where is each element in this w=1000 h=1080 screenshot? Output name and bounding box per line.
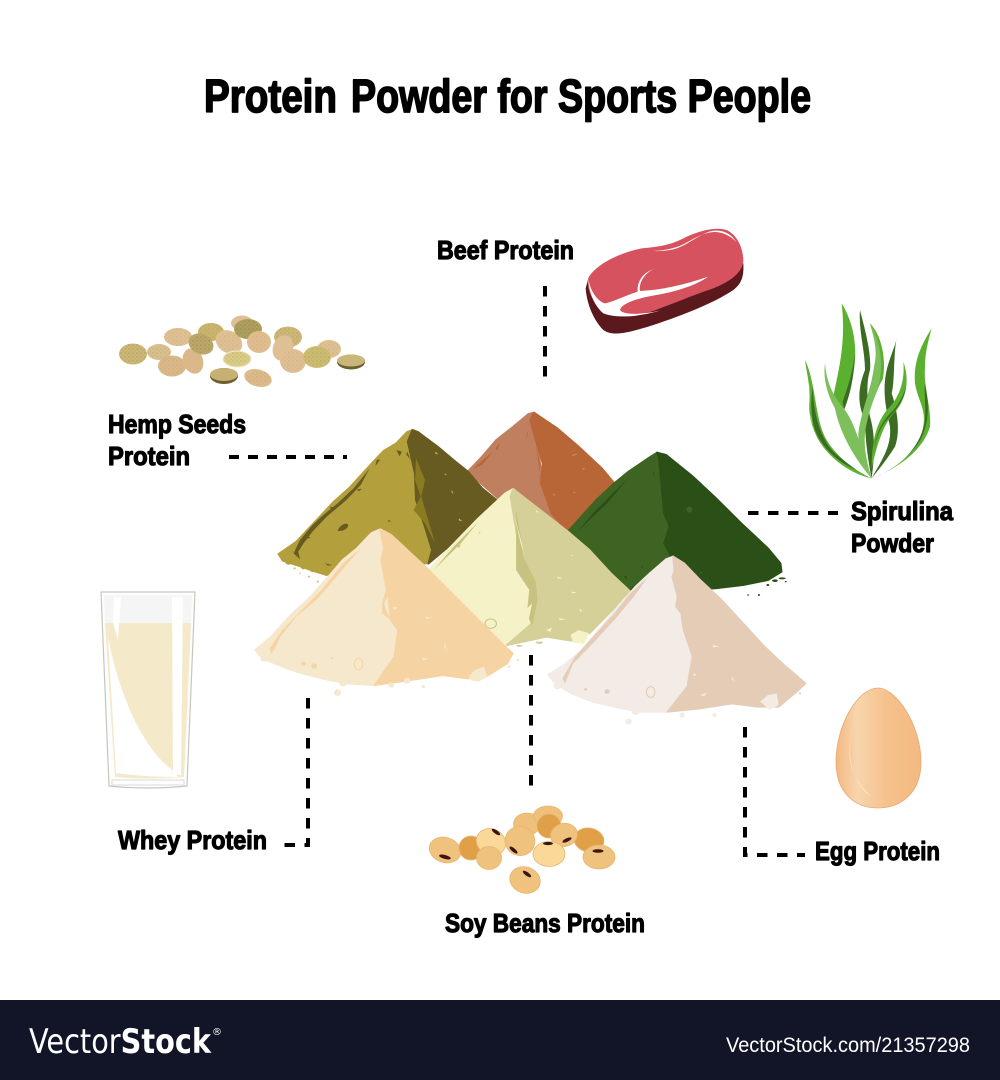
pile: spirulina powder [568,453,787,596]
label: egg protein: Egg Protein [815,836,940,866]
title: Protein [204,70,337,122]
connector: egg [745,727,805,855]
icon: egg [836,688,921,808]
label: hemp seeds protein: Hemp Seeds [108,409,246,439]
label: spirulina powder [851,496,953,558]
powder piles group [255,413,805,725]
connector: whey [278,698,308,845]
pile: whey protein [255,529,519,696]
label: soy beans protein: Soy Beans Protein [445,908,645,938]
icon: spirulina seaweed [805,303,932,478]
icon: soy beans [426,806,615,898]
pile: soy beans protein [429,489,630,647]
icon: hemp seeds [119,316,365,390]
connector: hemp [229,455,347,459]
footer id: VectorStock.com/21357298 [726,1034,970,1057]
title: Powder for Sports People [351,70,811,122]
label: spirulina powder: Powder [851,528,934,558]
footer bar [0,1000,1000,1080]
footer logo: ® [212,1027,222,1038]
icon: glass of whey [101,592,195,788]
pile: hemp seeds protein [279,430,496,583]
pile: beef protein [468,413,614,532]
label: hemp seeds protein: Protein [108,441,190,471]
label: beef protein: Beef Protein [437,235,574,265]
connector: spirulina [748,511,838,515]
label: spirulina powder: Spirulina [851,496,953,526]
footer logo: VectorStock [29,1022,212,1062]
pile: egg protein [548,557,805,725]
label: hemp seeds protein [108,409,246,471]
label: whey protein: Whey Protein [118,825,267,855]
connector: beef [543,286,547,377]
connector: soy [529,655,533,795]
title [204,70,811,122]
icon: beef steak [586,229,743,334]
